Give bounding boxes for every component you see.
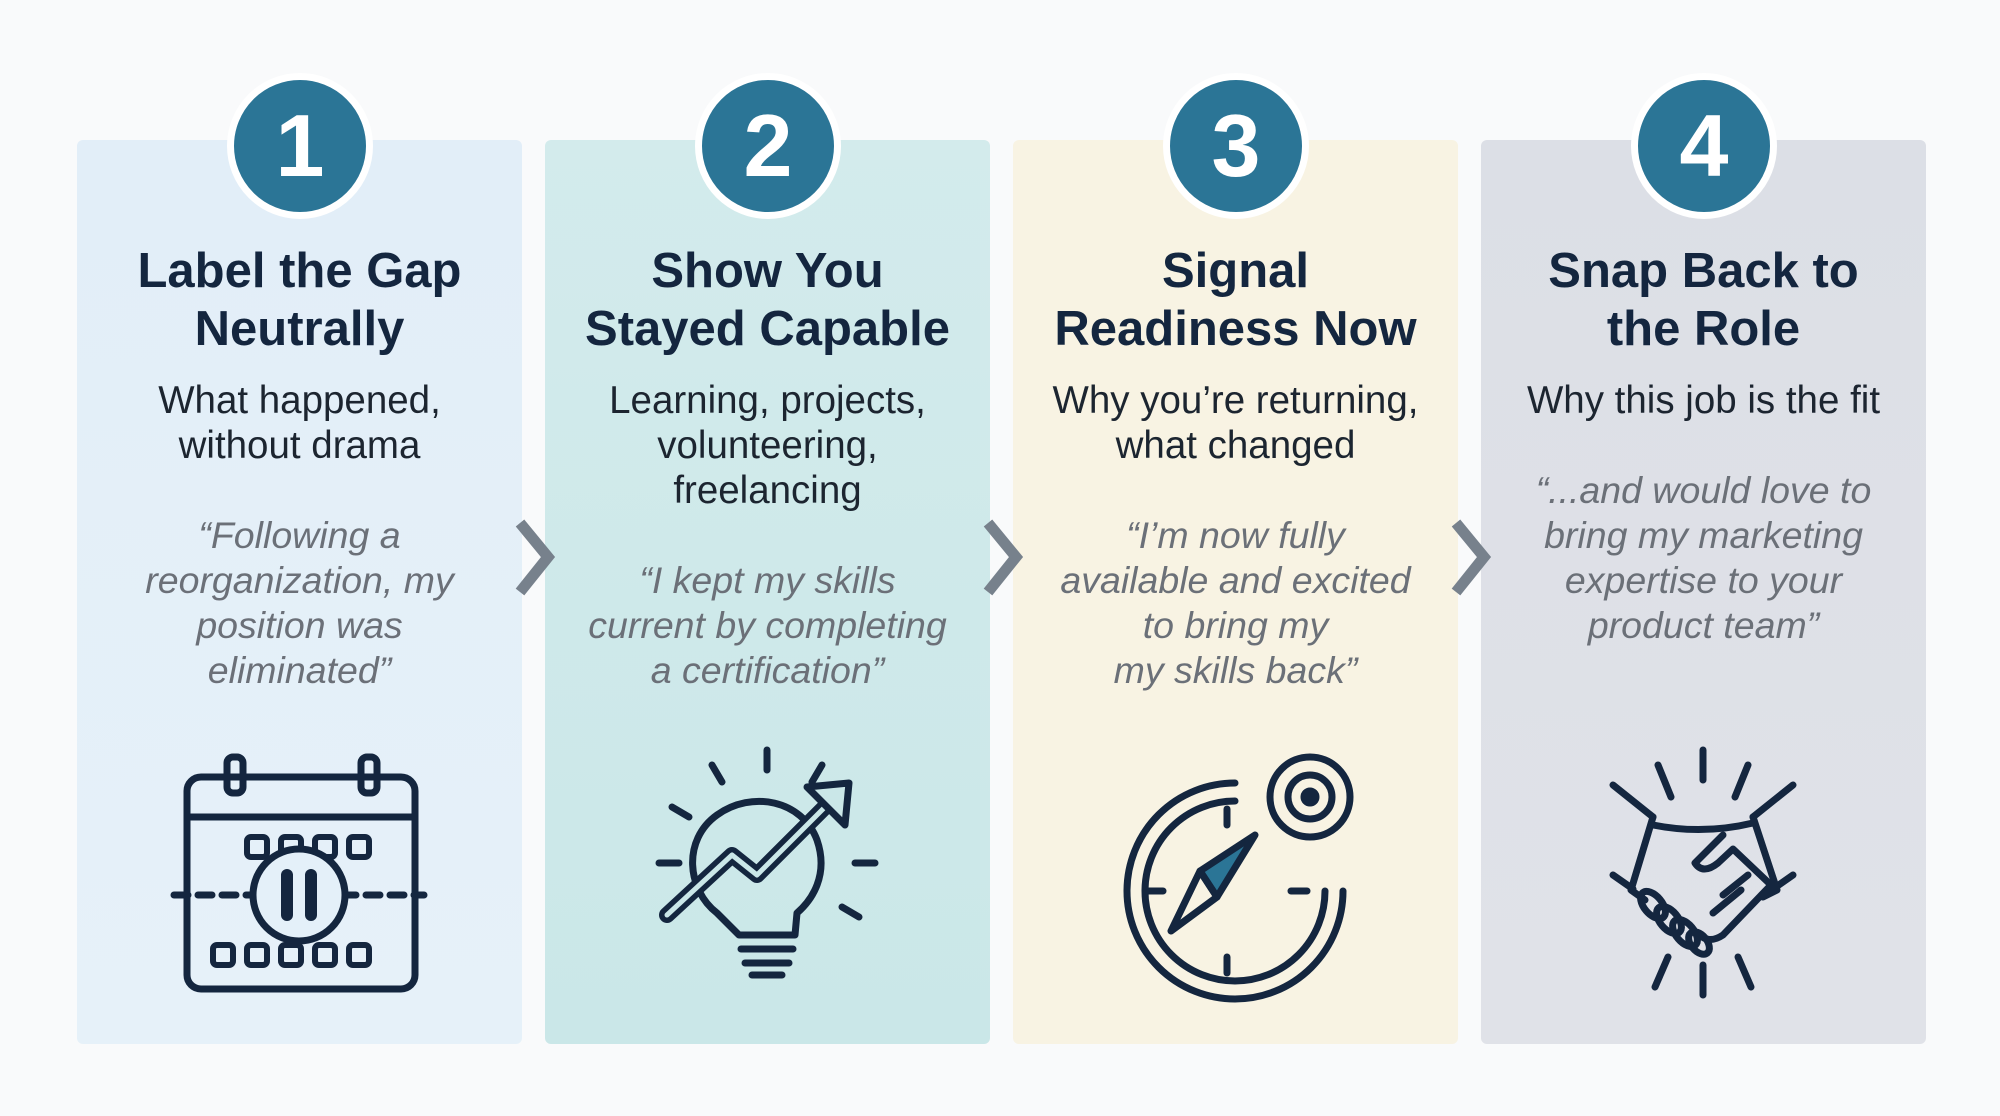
quote 4: expertise to your [1565,559,1842,601]
heading 4: Snap Back to [1548,244,1859,298]
subtitle 3: Why you’re returning, [1053,379,1418,422]
arrow 3-4 [1452,520,1491,596]
panel: step 3 [1013,140,1458,1044]
icon: lightbulb with growth arrow [656,746,878,978]
number badge 1: 1 [276,96,324,195]
subtitle 2: volunteering, [657,424,878,467]
quote 3: “I’m now fully [1126,514,1345,556]
heading 3: Signal [1162,244,1309,298]
heading 4: the Role [1607,302,1800,356]
subtitle 3: what changed [1116,424,1355,467]
heading 2 [585,244,950,356]
quote 1: “Following a [198,514,401,556]
icon: calendar with pause [170,754,428,992]
panel: step 2 [545,140,990,1044]
icon: handshake [1610,746,1796,998]
heading 4 [1548,244,1859,356]
icon: compass with target [1124,754,1354,1002]
number badge 4 [1631,73,1777,219]
arrow 2-3 [984,520,1023,596]
subtitle 2: freelancing [673,469,862,512]
number badge 1 [227,73,373,219]
quote 3: my skills back” [1114,649,1357,691]
quote 4 [1536,469,1871,646]
number badge 2 [695,73,841,219]
arrow 1-2 [516,520,555,596]
quote 3 [1060,514,1412,691]
quote 4: bring my marketing [1544,514,1863,556]
subtitle 2: Learning, projects, [609,379,926,422]
quote 3: available and excited [1060,559,1411,601]
quote 1 [145,514,456,691]
heading 1 [137,244,462,356]
quote 1: eliminated” [208,649,391,691]
heading 2: Show You [651,244,884,298]
heading 3 [1054,244,1417,356]
subtitle 1 [158,379,441,467]
number badge 3 [1163,73,1309,219]
heading 1: Label the Gap [137,244,462,298]
quote 2: “I kept my skills [639,559,896,601]
subtitle 1: without drama [179,424,420,467]
subtitle 3 [1052,379,1418,467]
subtitle 2 [609,379,926,512]
quote 2: current by completing [588,604,947,646]
number badge 2: 2 [744,96,792,195]
panel: step 4 [1481,140,1926,1044]
subtitle 1: What happened, [158,379,441,422]
panel: step 1 [77,140,522,1044]
number badge 4: 4 [1680,96,1728,195]
quote 2 [588,559,947,691]
quote 2: a certification” [651,649,884,691]
heading 2: Stayed Capable [585,302,950,356]
quote 1: reorganization, my [145,559,454,601]
subtitle 4: Why this job is the fit [1527,379,1880,422]
quote 3: to bring my [1143,604,1328,646]
heading 3: Readiness Now [1054,302,1417,356]
number badge 3: 3 [1212,96,1260,195]
quote 1: position was [196,604,403,646]
quote 4: “...and would love to [1536,469,1871,511]
quote 4: product team” [1588,604,1819,646]
heading 1: Neutrally [195,302,404,356]
